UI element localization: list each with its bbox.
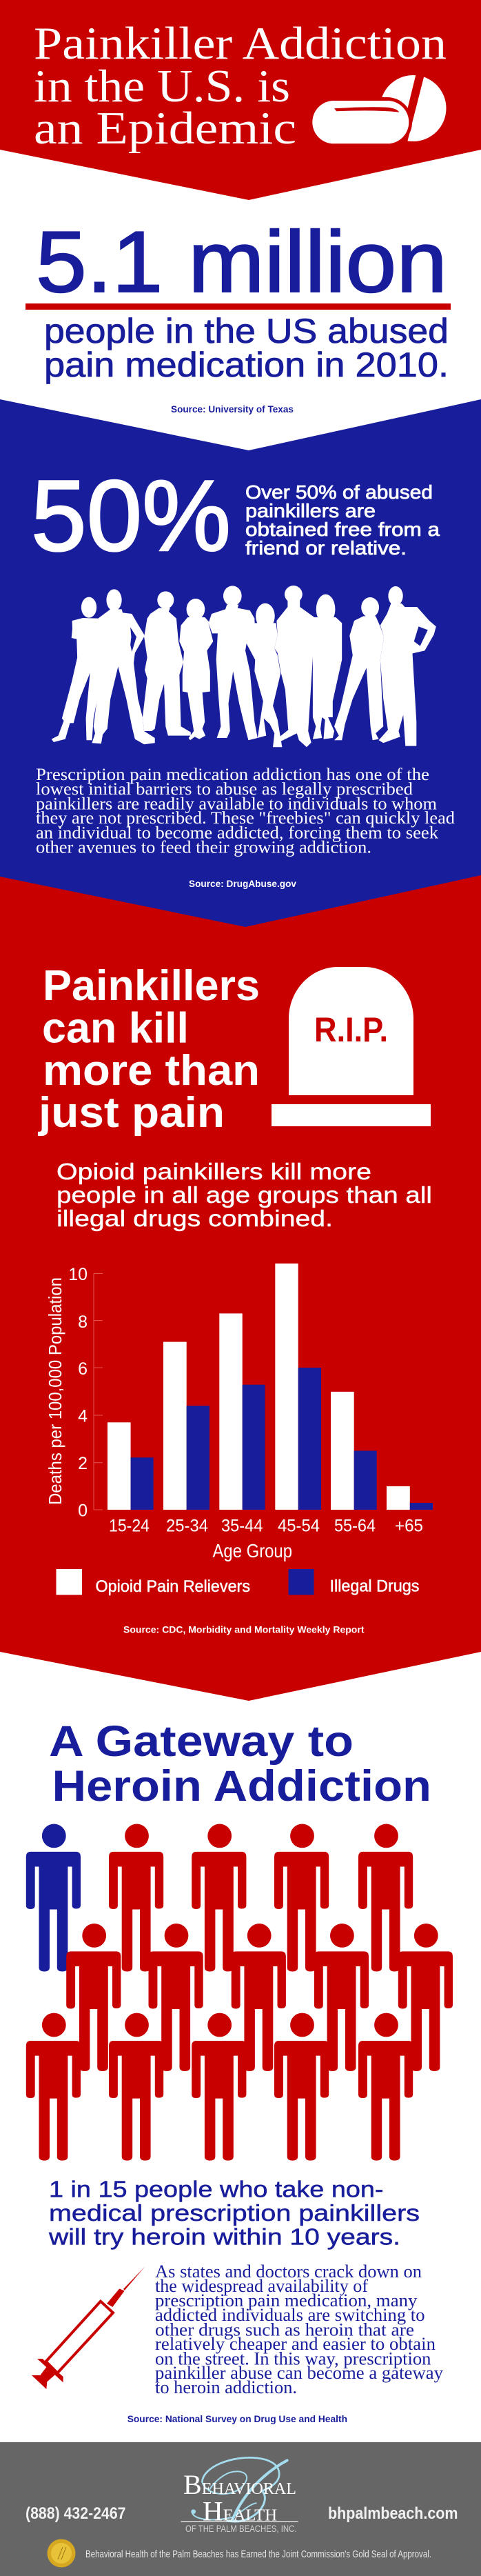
x axis labels: 45-54	[278, 1516, 320, 1535]
icon: gold seal	[47, 2539, 76, 2567]
opioid pain reliever bars	[108, 1264, 410, 1510]
50 percent caption: painkillers are	[245, 500, 376, 521]
illustration: group silhouette	[52, 586, 436, 747]
website: bhpalmbeach.com	[328, 2504, 458, 2523]
panel: red section background	[0, 855, 481, 1652]
statistic text	[48, 2177, 420, 2250]
y axis tick labels: 8	[78, 1312, 88, 1332]
panel: footer	[0, 2442, 481, 2576]
icon: pills	[309, 72, 447, 148]
y axis title: Deaths per 100,000 Population	[45, 1277, 65, 1505]
pictogram: 1 in 15 people	[26, 1824, 453, 2161]
explanatory paragraph: prescription pain medication, many	[155, 2290, 418, 2310]
heading: just pain	[38, 1089, 225, 1137]
title: an Epidemic	[34, 103, 296, 154]
red divider bar	[25, 303, 451, 310]
icon: tombstone: R.I.P.	[314, 1010, 388, 1049]
body paragraph	[36, 766, 456, 857]
x axis labels: 55-64	[334, 1516, 376, 1535]
body paragraph: other avenues to feed their growing addiction.	[36, 839, 371, 857]
statistic caption: people in the US abused	[44, 312, 449, 350]
body paragraph: lowest initial barriers to abuse as legally prescribed	[36, 780, 413, 799]
subheading: illegal drugs combined.	[57, 1206, 333, 1231]
heading: Heroin Addiction	[52, 1762, 431, 1810]
50 percent caption	[245, 481, 440, 559]
subheading	[57, 1159, 432, 1231]
y axis tick labels: 6	[78, 1359, 88, 1379]
y axis	[94, 1273, 103, 1510]
body paragraph: an individual to become addicted, forcing them to seek	[36, 823, 439, 843]
legend: Illegal Drugs	[329, 1577, 419, 1596]
logo: Behavioral Health	[181, 2457, 298, 2534]
explanatory paragraph: other drugs such as heroin that are	[155, 2320, 414, 2339]
icon: tombstone	[272, 967, 431, 1126]
title: in the U.S. is	[34, 61, 290, 112]
heading: A Gateway to	[49, 1717, 354, 1766]
big 50 percent: 50%	[31, 459, 231, 572]
y axis tick labels: 0	[78, 1501, 88, 1520]
x axis labels: 35-44	[221, 1516, 263, 1535]
explanatory paragraph: the widespread availability of	[155, 2276, 368, 2296]
x axis labels: +65	[395, 1516, 423, 1535]
y axis tick labels: 10	[68, 1265, 88, 1284]
y axis tick labels: 4	[78, 1407, 88, 1426]
y axis tick labels: 2	[78, 1454, 88, 1473]
phone number: (888) 432-2467	[25, 2504, 125, 2523]
50 percent caption: friend or relative.	[245, 537, 407, 559]
50 percent caption: Over 50% of abused	[245, 481, 433, 503]
red chevron tip	[0, 1652, 481, 1701]
explanatory paragraph	[155, 2262, 443, 2397]
panel: gateway to heroin section	[26, 1717, 453, 2424]
legend	[57, 1569, 419, 1596]
body paragraph: painkillers are readily available to individuals to whom	[36, 795, 438, 814]
bar chart	[45, 1264, 433, 1596]
statistic text: will try heroin within 10 years.	[48, 2224, 400, 2250]
source: National Survey: Source: National Survey on Drug Use and Health	[127, 2413, 347, 2424]
body paragraph: they are not prescribed. These "freebies" can quickly lead	[36, 809, 456, 828]
panel: 5.1 million statistic	[25, 213, 451, 384]
x axis labels: 15-24	[109, 1516, 150, 1535]
statistic text: 1 in 15 people who take non-	[49, 2177, 383, 2201]
body paragraph: Prescription pain medication addiction has one of the	[36, 766, 429, 784]
explanatory paragraph: on the street. In this way, prescription	[155, 2349, 431, 2368]
title	[34, 18, 447, 154]
x axis labels: 25-34	[166, 1516, 208, 1535]
source: University of Texas: Source: University of Texas	[171, 403, 294, 415]
statistic caption	[44, 312, 449, 384]
logo: Behavioral Health: OF THE PALM BEACHES, INC.	[185, 2523, 296, 2534]
legend: Opioid Pain Relievers	[95, 1577, 250, 1596]
statistic text: medical prescription painkillers	[49, 2200, 420, 2226]
heading	[38, 962, 260, 1137]
subheading: Opioid painkillers kill more	[57, 1159, 371, 1184]
heading	[49, 1717, 431, 1810]
x axis title: Age Group	[212, 1540, 292, 1561]
explanatory paragraph: to heroin addiction.	[155, 2377, 297, 2397]
x axis labels	[109, 1516, 423, 1535]
panel: 50 percent section	[0, 399, 481, 927]
heading: Painkillers	[43, 962, 260, 1010]
source: CDC: Source: CDC, Morbidity and Mortality Weekly Report	[123, 1624, 365, 1635]
explanatory paragraph: painkiller abuse can become a gateway	[155, 2363, 443, 2383]
title: Painkiller Addiction	[34, 18, 447, 69]
icon: syringe	[32, 2266, 145, 2389]
logo: Behavioral Health: BEHAVIORAL	[183, 2469, 296, 2500]
statistic caption: pain medication in 2010.	[44, 346, 449, 384]
logo: Behavioral Health: HEALTH	[203, 2495, 277, 2527]
heading: can kill	[42, 1004, 189, 1052]
subheading: people in all age groups than all	[57, 1182, 432, 1208]
source: DrugAbuse.gov: Source: DrugAbuse.gov	[189, 878, 296, 889]
y axis tick labels	[68, 1265, 88, 1520]
explanatory paragraph: addicted individuals are switching to	[155, 2305, 424, 2325]
50 percent caption: obtained free from a	[245, 519, 440, 540]
big number: 5.1 million	[36, 213, 447, 310]
panel: painkillers can kill section	[0, 962, 481, 1701]
explanatory paragraph: relatively cheaper and easier to obtain	[155, 2334, 436, 2354]
explanatory paragraph: As states and doctors crack down on	[155, 2262, 422, 2282]
illegal drug bars	[131, 1368, 433, 1510]
panel: header banner	[0, 0, 481, 200]
heading: more than	[43, 1047, 260, 1095]
